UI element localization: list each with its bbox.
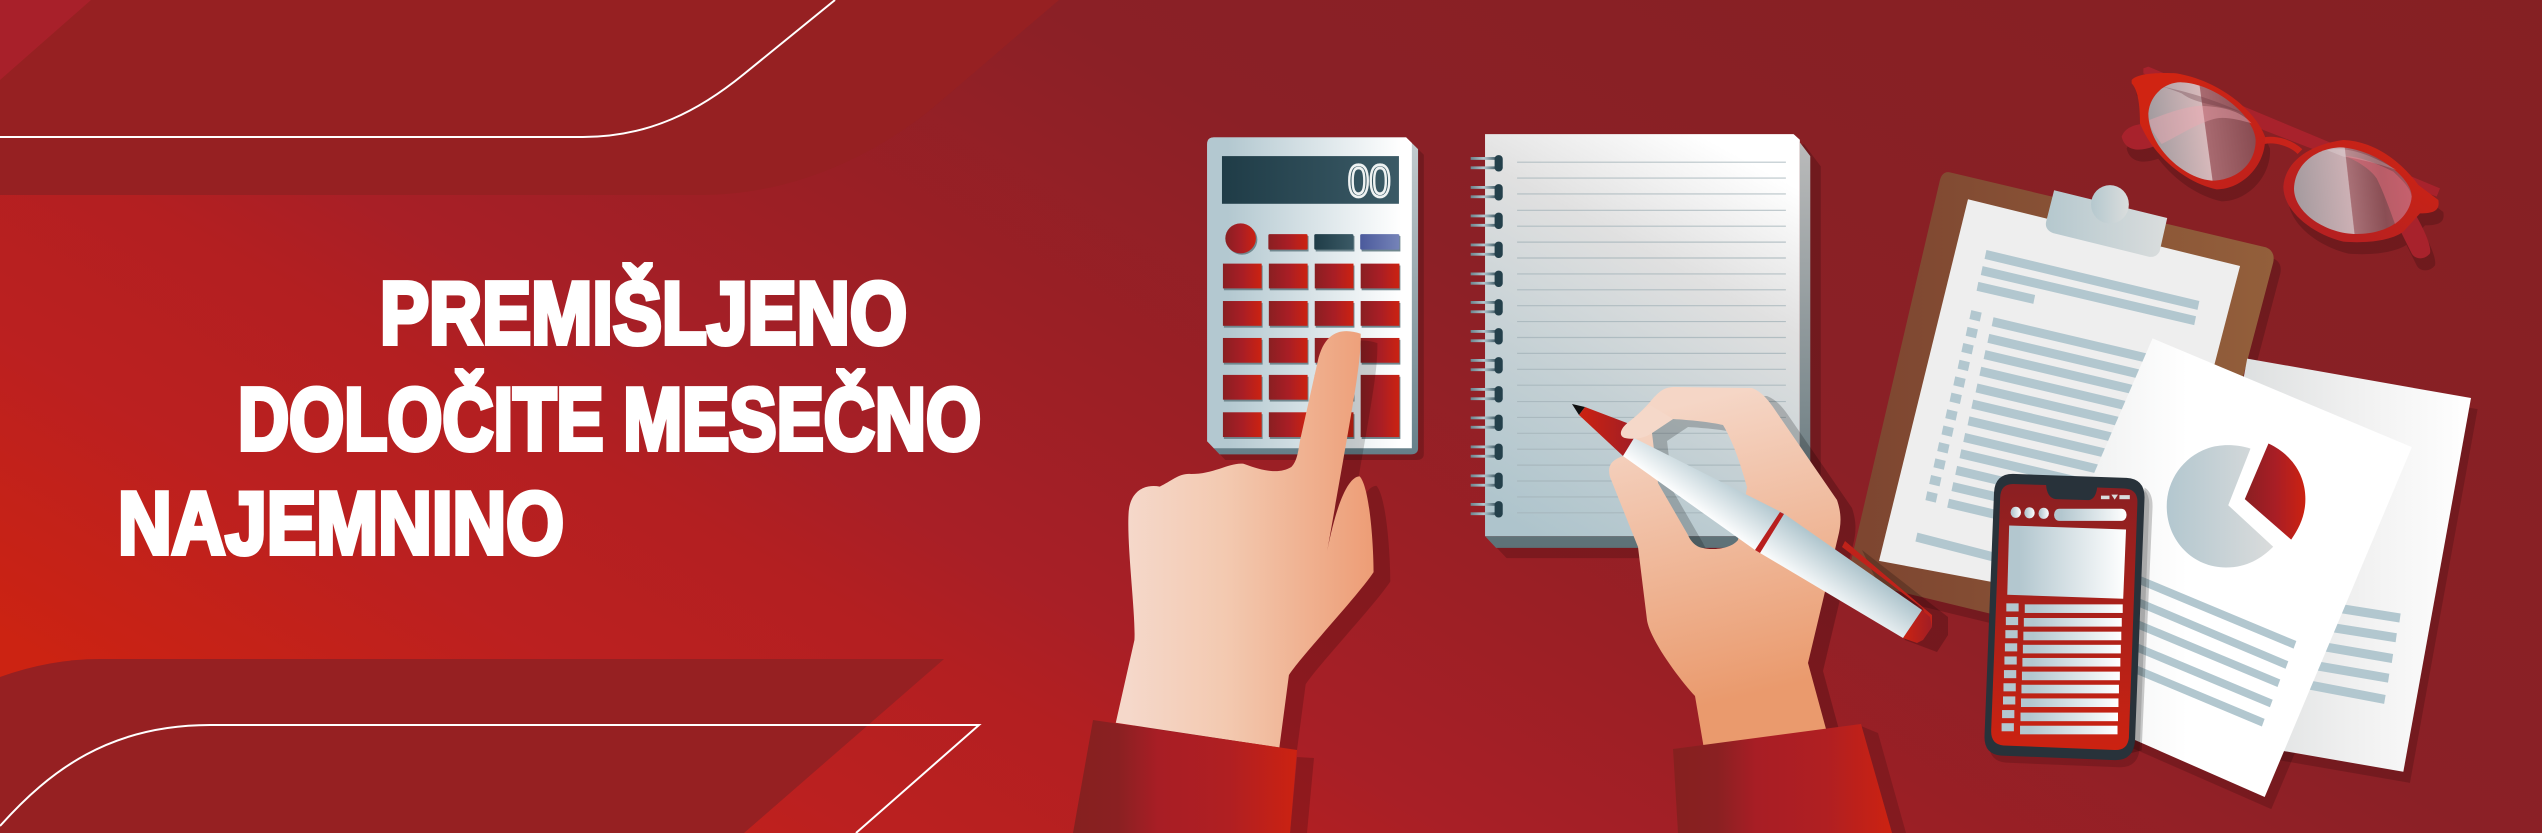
left frame bbox=[2132, 73, 2265, 189]
pen nib bbox=[1572, 404, 1585, 415]
calculator body bbox=[1207, 137, 1412, 448]
glasses temples bbox=[2122, 67, 2440, 258]
calculator shadow bbox=[1213, 143, 1424, 460]
notebook lines bbox=[1517, 162, 1786, 513]
front paper shadow bbox=[2010, 350, 2418, 809]
clipboard board bbox=[1850, 172, 2274, 657]
clipboard clip bbox=[2046, 185, 2167, 257]
calculator keys bbox=[1223, 223, 1400, 439]
pen cap end bbox=[1903, 610, 1932, 643]
clipboard and papers group bbox=[1850, 172, 2478, 809]
glasses bridge bbox=[2264, 140, 2300, 152]
clipboard shadow bbox=[1858, 183, 2281, 668]
right hand bbox=[1609, 387, 1840, 749]
right lens bbox=[2294, 147, 2412, 234]
notebook shadow bbox=[1496, 144, 1821, 558]
title: NAJEMNINO bbox=[118, 474, 564, 572]
bottom band bbox=[0, 659, 944, 833]
calculator side bbox=[1207, 137, 1418, 454]
right frame bbox=[2283, 140, 2439, 242]
index fingertip bbox=[1621, 405, 1673, 439]
left hand bbox=[1116, 331, 1374, 747]
pen ring bbox=[1755, 512, 1784, 553]
calculator display bbox=[1222, 156, 1399, 204]
calculator digits: 00 bbox=[1348, 155, 1391, 206]
bottom white line bbox=[0, 725, 979, 833]
title: PREMIŠLJENO bbox=[380, 264, 907, 362]
pen body bbox=[1623, 438, 1922, 638]
pen tip bbox=[1579, 407, 1635, 456]
back paper shadow bbox=[2185, 370, 2478, 783]
clipboard paper bbox=[1879, 199, 2240, 611]
left sleeve shadow bbox=[1290, 757, 1314, 833]
notebook side bbox=[1485, 134, 1810, 548]
front paper bbox=[2003, 338, 2412, 797]
right hand shadow bbox=[1624, 395, 1856, 757]
glasses bbox=[2122, 67, 2444, 270]
phone bbox=[1984, 474, 2149, 767]
pie chart bbox=[2167, 444, 2305, 567]
pen clip bbox=[1842, 541, 1932, 627]
clipboard text bars bbox=[1916, 254, 2198, 558]
top band bbox=[0, 0, 1059, 195]
pen shadow bbox=[1862, 550, 1948, 652]
pen bbox=[1572, 404, 1948, 652]
right sleeve bbox=[1673, 724, 1892, 833]
title: DOLOČITE MESEČNO bbox=[238, 370, 981, 468]
left lens bbox=[2148, 82, 2256, 181]
glasses shadow bbox=[2127, 85, 2444, 270]
left hand shadow bbox=[1133, 340, 1390, 757]
back paper bars bbox=[2305, 605, 2400, 699]
phone shadow bbox=[2131, 488, 2153, 753]
right sleeve shadow bbox=[1861, 726, 1906, 833]
calculator and notebook group bbox=[1116, 134, 1821, 757]
notebook page bbox=[1485, 134, 1800, 536]
notebook spiral bbox=[1471, 155, 1503, 517]
top white line bbox=[0, 0, 835, 137]
back paper bbox=[2179, 359, 2471, 772]
title bbox=[118, 264, 981, 572]
left sleeve bbox=[1073, 720, 1297, 833]
front paper bars bbox=[2109, 580, 2295, 723]
